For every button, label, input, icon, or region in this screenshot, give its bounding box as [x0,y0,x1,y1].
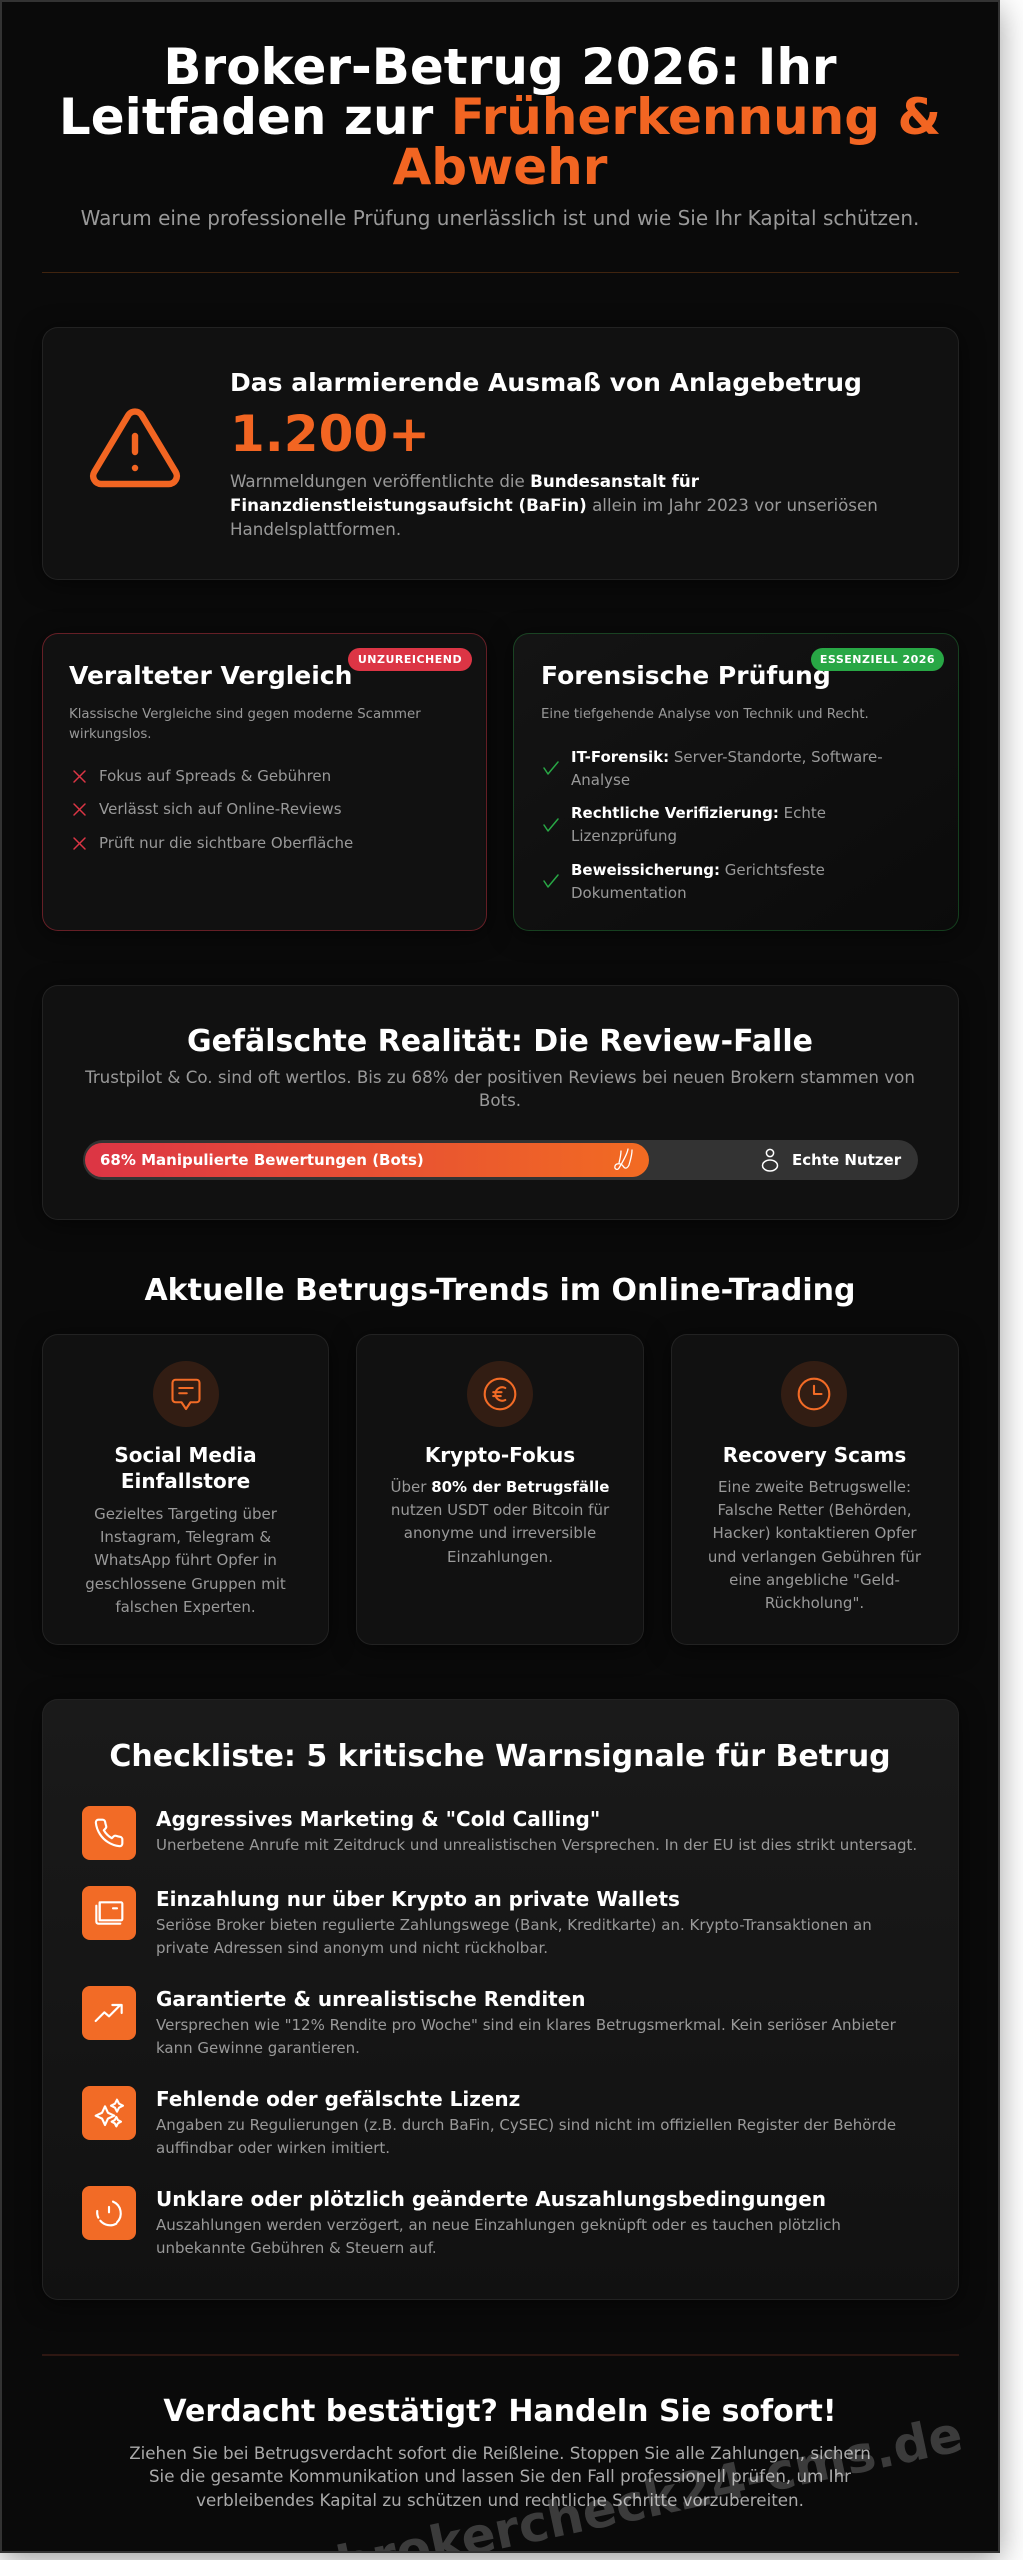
card text: Gezieltes Targeting über [94,1505,277,1523]
subtitle: Warum eine professionelle Prüfung unerlässlich ist und wie Sie Ihr Kapital schützen. [81,206,919,230]
footer text: Ziehen Sie bei Betrugsverdacht sofort die Reißleine. Stoppen Sie alle Zahlungen, sichern [129,2443,871,2463]
card title: Recovery Scams [723,1443,906,1467]
card text: Rückholung". [765,1594,864,1612]
item 1: Unerbetene Anrufe mit Zeitdruck und unrealistischen Versprechen. In der EU ist dies strikt untersagt. [156,1836,917,1854]
card text [85,1505,286,1616]
card text: anonyme und irreversible [404,1524,596,1542]
stat description [230,470,878,538]
list: checks [543,748,883,902]
panel: checklist: unbekannte Gebühren & Steuern auf. [156,2239,437,2257]
item 4 [82,2086,896,2157]
stat description: Finanzdienstleistungsaufsicht (BaFin) allein im Jahr 2023 vor unseriösen [230,494,878,514]
item 3 [82,1986,896,2057]
heading: Forensische Prüfung [541,661,831,690]
item 5: Unklare oder plötzlich geänderte Auszahlungsbedingungen [156,2187,826,2211]
bar fill: 68 percent bots [85,1143,649,1177]
progress bar [83,1140,918,1180]
card title [114,1443,257,1493]
card text: Eine zweite Betrugswelle: [718,1478,911,1496]
panel: crypto focus [356,1334,644,1645]
footer text: verbleibendes Kapital zu schützen und rechtliche Schritte vorzubereiten. [196,2490,804,2510]
panel: review trap [42,985,959,1220]
icon: euro coin [467,1361,533,1427]
heading: Checkliste: 5 kritische Warnsignale für Betrug [109,1739,891,1774]
list: shortcomings: Verlässt sich auf Online-Reviews [99,800,342,818]
item 2: Einzahlung nur über Krypto an private Wallets [156,1887,680,1911]
description [85,1066,915,1110]
icon: withdrawal circle [82,2186,136,2240]
item 3: Versprechen wie "12% Rendite pro Woche" sind ein klares Betrugsmerkmal. Kein seriöser Anbieter [156,2016,896,2034]
icon: phone [82,1806,136,1860]
icon: sparkles [82,2086,136,2140]
badge: essential [811,648,944,671]
title: Leitfaden zur Früherkennung & [59,88,941,146]
description: wirkungslos. [69,726,152,742]
icon: cross [73,770,86,783]
icon: check [543,874,559,888]
badge: essential: ESSENZIELL 2026 [820,653,935,666]
stat heading: Das alarmierende Ausmaß von Anlagebetrug [230,368,862,397]
footer heading: Verdacht bestätigt? Handeln Sie sofort! [163,2394,837,2429]
title: Broker-Betrug 2026: Ihr [163,38,837,96]
icon: clock [781,1361,847,1427]
card text: Einzahlungen. [447,1548,553,1566]
card text: Instagram, Telegram & [100,1528,271,1546]
heading: Gefälschte Realität: Die Review-Falle [187,1024,813,1059]
panel: recovery scams [671,1334,959,1645]
icon: real user [762,1148,778,1172]
icon: trend up [82,1986,136,2040]
icon: wallet [82,1886,136,1940]
list: checks: Rechtliche Verifizierung: Echte [571,804,826,822]
list: checks: Dokumentation [571,884,687,902]
card title: Krypto-Fokus [425,1443,575,1467]
list: checks: IT-Forensik: Server-Standorte, Software- [571,748,883,766]
footer text [129,2443,871,2510]
title [59,38,941,196]
item 5: Auszahlungen werden verzögert, an neue Einzahlungen geknüpft oder es tauchen plötzlich [156,2216,841,2234]
icon: check [543,761,559,775]
list: shortcomings: Fokus auf Spreads & Gebühren [99,766,331,784]
icon: bot hand [614,1148,633,1170]
card text: Falsche Retter (Behörden, [717,1501,912,1519]
bar label: 68% Manipulierte Bewertungen (Bots) [100,1151,424,1169]
item 4: Angaben zu Regulierungen (z.B. durch BaFin, CySEC) sind nicht im offiziellen Register der Behörde [156,2116,896,2134]
icon: chat bubble [153,1361,219,1427]
description: Klassische Vergleiche sind gegen moderne Scammer [69,706,421,722]
description: Trustpilot & Co. sind oft wertlos. Bis zu 68% der positiven Reviews bei neuen Brokern stammen von [85,1066,915,1086]
item 1: Aggressives Marketing & "Cold Calling" [156,1807,600,1831]
description: Bots. [479,1090,521,1110]
icon: cross [73,803,86,816]
card text: falschen Experten. [115,1598,256,1616]
section heading: trends: Aktuelle Betrugs-Trends im Online-Trading [144,1273,856,1308]
stat description: Warnmeldungen veröffentlichte die Bundesanstalt für [230,470,699,490]
card title: Einfallstore [121,1469,250,1493]
card text: eine angebliche "Geld- [729,1571,900,1589]
card text: und verlangen Gebühren für [708,1548,921,1566]
item 2: Seriöse Broker bieten regulierte Zahlungswege (Bank, Kreditkarte) an. Krypto-Transaktionen an [156,1916,872,1934]
card text: geschlossene Gruppen mit [85,1575,286,1593]
panel: alarming scale [42,327,959,580]
item 2 [82,1886,872,1957]
footer text: Sie die gesamte Kommunikation und lassen Sie den Fall professionell prüfen, um Ihr [149,2466,851,2486]
description: Eine tiefgehende Analyse von Technik und Recht. [541,706,869,722]
card text: Hacker) kontaktieren Opfer [712,1524,917,1542]
description [69,706,421,742]
badge: insufficient [348,648,472,671]
list: shortcomings [73,766,353,852]
card text: WhatsApp führt Opfer in [94,1551,277,1569]
panel: checklist [42,1699,959,2300]
panel: checklist: auffindbar oder wirken imitiert. [156,2139,390,2157]
list: shortcomings: Prüft nur die sichtbare Oberfläche [99,834,353,852]
list: checks: Analyse [571,770,630,788]
stat description: Handelsplattformen. [230,518,401,538]
card text [708,1478,922,1612]
card text: Über 80% der Betrugsfälle [391,1478,609,1496]
stat number: 1.200+ [230,405,430,463]
item 5 [82,2186,841,2257]
icon: check [543,818,559,832]
card text [391,1478,610,1566]
badge: insufficient: UNZUREICHEND [358,653,462,666]
legend label: Echte Nutzer [792,1151,901,1169]
item 1 [82,1806,917,1860]
card title: Social Media [114,1443,257,1467]
icon: warning triangle [90,408,180,488]
icon: cross [73,837,86,850]
list: checks: Lizenzprüfung [571,827,677,845]
panel: forensic review [513,633,959,931]
title: Abwehr [393,138,607,196]
item 3: Garantierte & unrealistische Renditen [156,1987,586,2011]
list: checks: Beweissicherung: Gerichtsfeste [571,861,825,879]
panel: outdated comparison [42,633,487,931]
item 4: Fehlende oder gefälschte Lizenz [156,2087,520,2111]
panel: checklist: kann Gewinne garantieren. [156,2039,360,2057]
panel: social media [42,1334,329,1645]
panel: checklist: private Adressen sind anonym und nicht rückholbar. [156,1939,548,1957]
heading: Veralteter Vergleich [69,661,352,690]
card text: nutzen USDT oder Bitcoin für [391,1501,609,1519]
